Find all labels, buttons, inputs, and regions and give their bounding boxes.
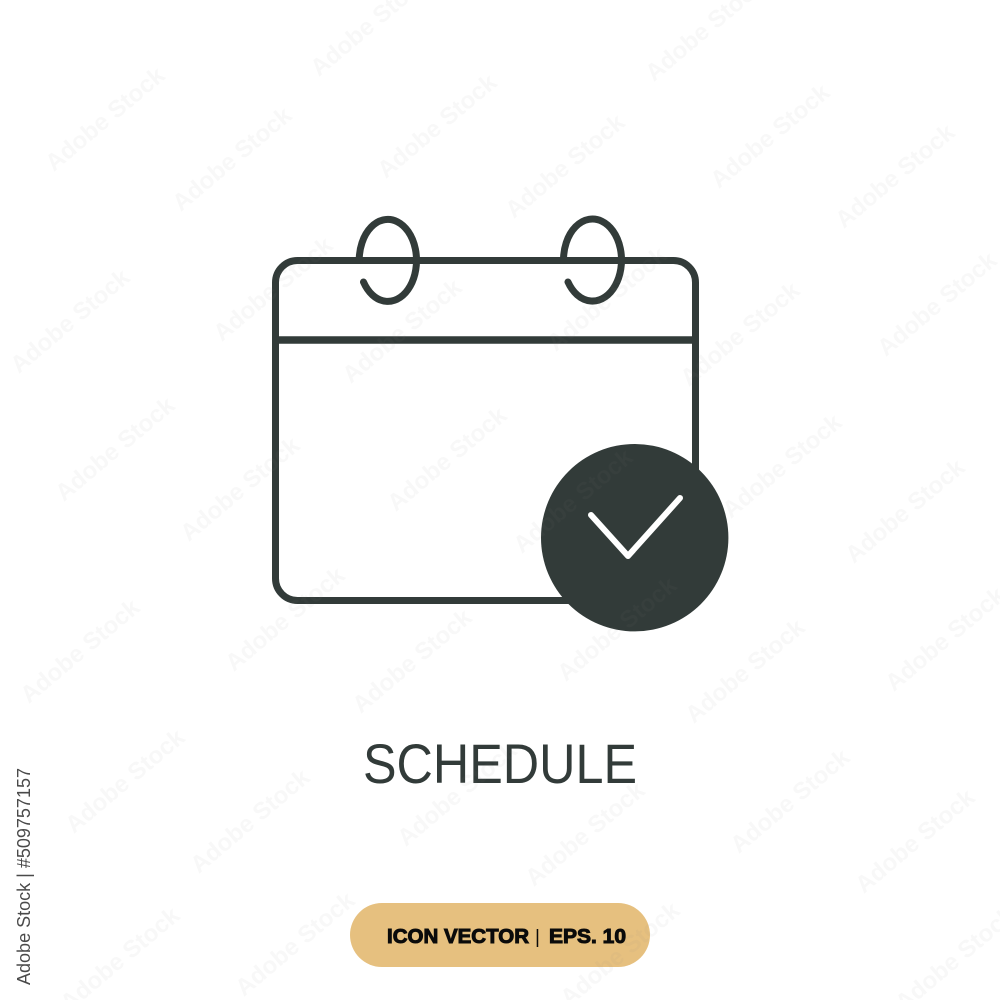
- badge: icon vector pill: [350, 903, 650, 967]
- watermark pattern: Adobe Stock: [680, 613, 811, 729]
- watermark pattern: Adobe Stock: [508, 443, 639, 559]
- watermark pattern: Adobe Stock: [830, 118, 961, 234]
- pill label: ICON VECTOR: [387, 925, 529, 948]
- watermark pattern: Adobe Stock: [705, 78, 836, 194]
- watermark pattern: Adobe Stock: [850, 783, 981, 899]
- watermark pattern: Adobe Stock: [717, 408, 848, 524]
- watermark pattern: Adobe Stock: [872, 246, 1000, 362]
- left binder ring: [359, 219, 416, 301]
- icon: calendar with check badge: [276, 219, 728, 631]
- watermark pattern: Adobe Stock: [208, 231, 339, 347]
- watermark pattern: Adobe Stock: [185, 763, 316, 879]
- calendar header divider: [276, 336, 696, 344]
- title: SCHEDULE: SCHEDULE: [363, 732, 637, 795]
- check badge circle: [541, 444, 728, 631]
- pill background: [350, 903, 650, 967]
- watermark pattern: Adobe Stock: [175, 431, 306, 547]
- watermark pattern: Adobe Stock: [372, 68, 503, 184]
- pill label: [387, 925, 626, 948]
- watermark pattern: Adobe Stock: [167, 101, 298, 217]
- check mark: [591, 498, 680, 556]
- watermark pattern: Adobe Stock: [840, 453, 971, 569]
- watermark pattern: Adobe Stock: [15, 593, 146, 709]
- watermark pattern: Adobe Stock: [675, 276, 806, 392]
- calendar body: [276, 260, 696, 600]
- watermark pattern: Adobe Stock: [552, 571, 683, 687]
- right binder ring: [563, 219, 621, 301]
- watermark pattern: Adobe Stock: [337, 273, 468, 389]
- watermark pattern: Adobe Stock: [725, 743, 856, 859]
- watermark pattern: Adobe Stock: [520, 776, 651, 892]
- watermark pattern: Adobe Stock: [392, 736, 523, 852]
- watermark pattern: Adobe Stock: [50, 391, 181, 507]
- watermark pattern: Adobe Stock: [60, 723, 191, 839]
- side credit: stock id: Adobe Stock | #509757157: [14, 768, 34, 985]
- pill label: |: [535, 927, 540, 948]
- watermark pattern: Adobe Stock: [5, 263, 136, 379]
- pill label: EPS. 10: [549, 925, 626, 948]
- watermark pattern: Adobe Stock: [40, 61, 171, 177]
- watermark pattern: Adobe Stock: [542, 241, 673, 357]
- watermark pattern: Adobe Stock: [500, 108, 631, 224]
- watermark pattern: Adobe Stock: [347, 603, 478, 719]
- watermark pattern: Adobe Stock: [220, 561, 351, 677]
- watermark pattern: Adobe Stock: [382, 401, 513, 517]
- watermark pattern: Adobe Stock: [230, 886, 361, 1000]
